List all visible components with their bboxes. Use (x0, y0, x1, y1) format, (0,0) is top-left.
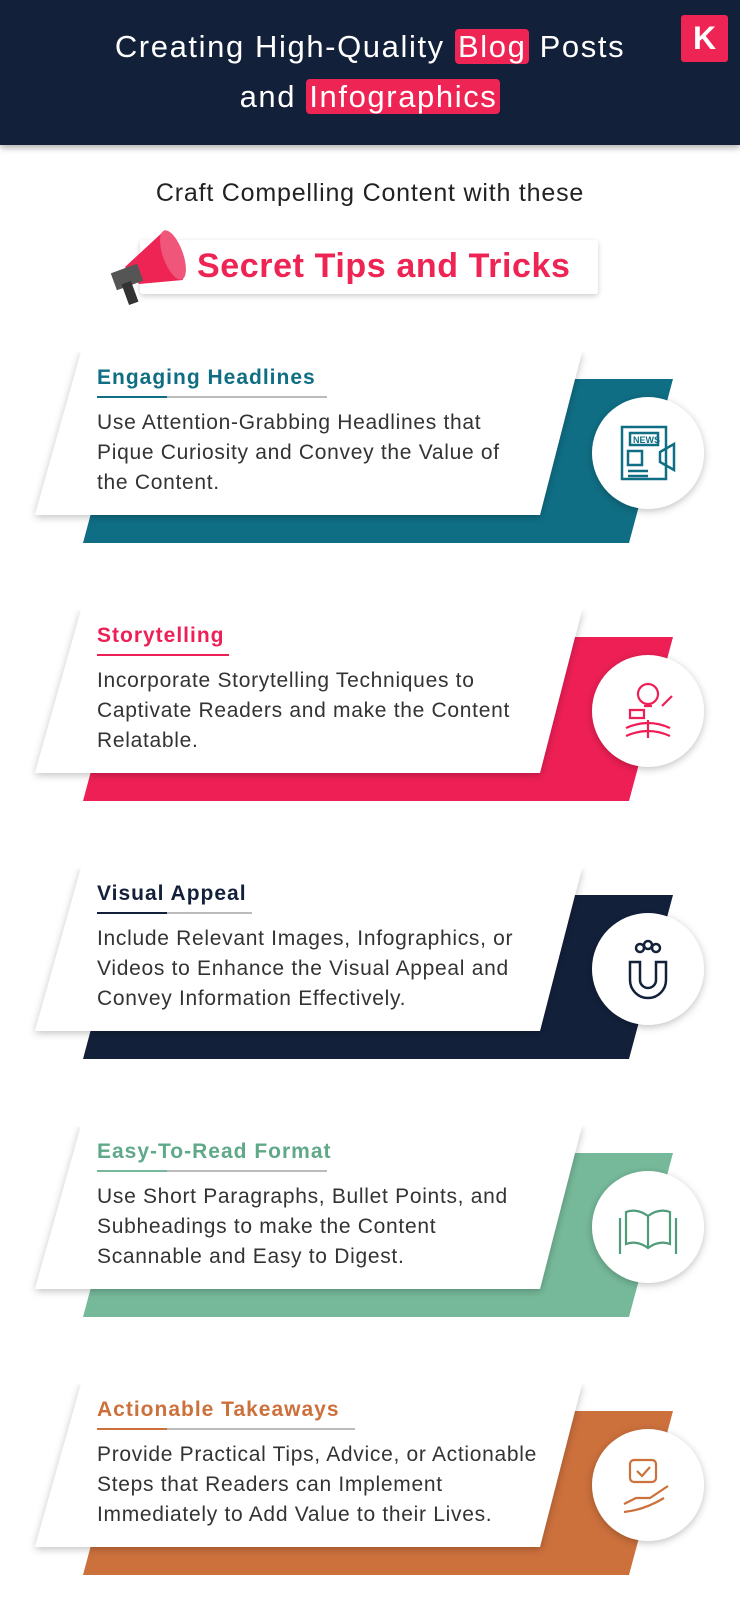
card 1 (32, 352, 708, 543)
icon: open book (620, 1211, 676, 1254)
header bar (0, 0, 740, 145)
card 3 (32, 868, 708, 1059)
secret tips box (140, 240, 598, 294)
body text: Convey Information Effectively. (97, 987, 406, 1010)
title (115, 29, 625, 114)
body text (97, 1443, 537, 1526)
body text (97, 669, 510, 752)
body text: Steps that Readers can Implement (97, 1473, 443, 1496)
body text: Use Attention-Grabbing Headlines that (97, 411, 481, 434)
card 1: NEWS (633, 435, 660, 445)
heading: Storytelling (97, 624, 225, 647)
subtitle: Craft Compelling Content with these (156, 179, 584, 207)
body text: Incorporate Storytelling Techniques to (97, 669, 475, 692)
body text: Provide Practical Tips, Advice, or Actionable (97, 1443, 537, 1466)
body text: the Content. (97, 471, 220, 494)
body text (97, 411, 500, 494)
icon: storytelling (626, 684, 672, 738)
card 2 (32, 610, 708, 801)
body text: Captivate Readers and make the Content (97, 699, 510, 722)
body text: Use Short Paragraphs, Bullet Points, and (97, 1185, 508, 1208)
body text: Immediately to Add Value to their Lives. (97, 1503, 492, 1526)
secret tips box: Secret Tips and Tricks (197, 247, 571, 285)
icon: megaphone (110, 230, 186, 305)
title: Creating High-Quality Blog Posts (115, 29, 625, 64)
card 5 (32, 1384, 708, 1575)
icon: news (622, 427, 674, 479)
body text (97, 1185, 508, 1268)
body text: Videos to Enhance the Visual Appeal and (97, 957, 509, 980)
body text (97, 927, 513, 1010)
heading: Engaging Headlines (97, 366, 316, 389)
heading: Actionable Takeaways (97, 1398, 340, 1421)
body text: Subheadings to make the Content (97, 1215, 436, 1238)
title: and Infographics (240, 79, 497, 114)
card 4 (32, 1126, 708, 1317)
icon: magnet (630, 941, 666, 998)
logo: K (693, 20, 716, 56)
body text: Include Relevant Images, Infographics, or (97, 927, 513, 950)
body text: Scannable and Easy to Digest. (97, 1245, 404, 1268)
body text: Pique Curiosity and Convey the Value of (97, 441, 500, 464)
icon: hand with check (624, 1460, 668, 1512)
logo (681, 15, 728, 62)
body text: Relatable. (97, 729, 199, 752)
heading: Easy-To-Read Format (97, 1140, 332, 1163)
heading: Visual Appeal (97, 882, 247, 905)
